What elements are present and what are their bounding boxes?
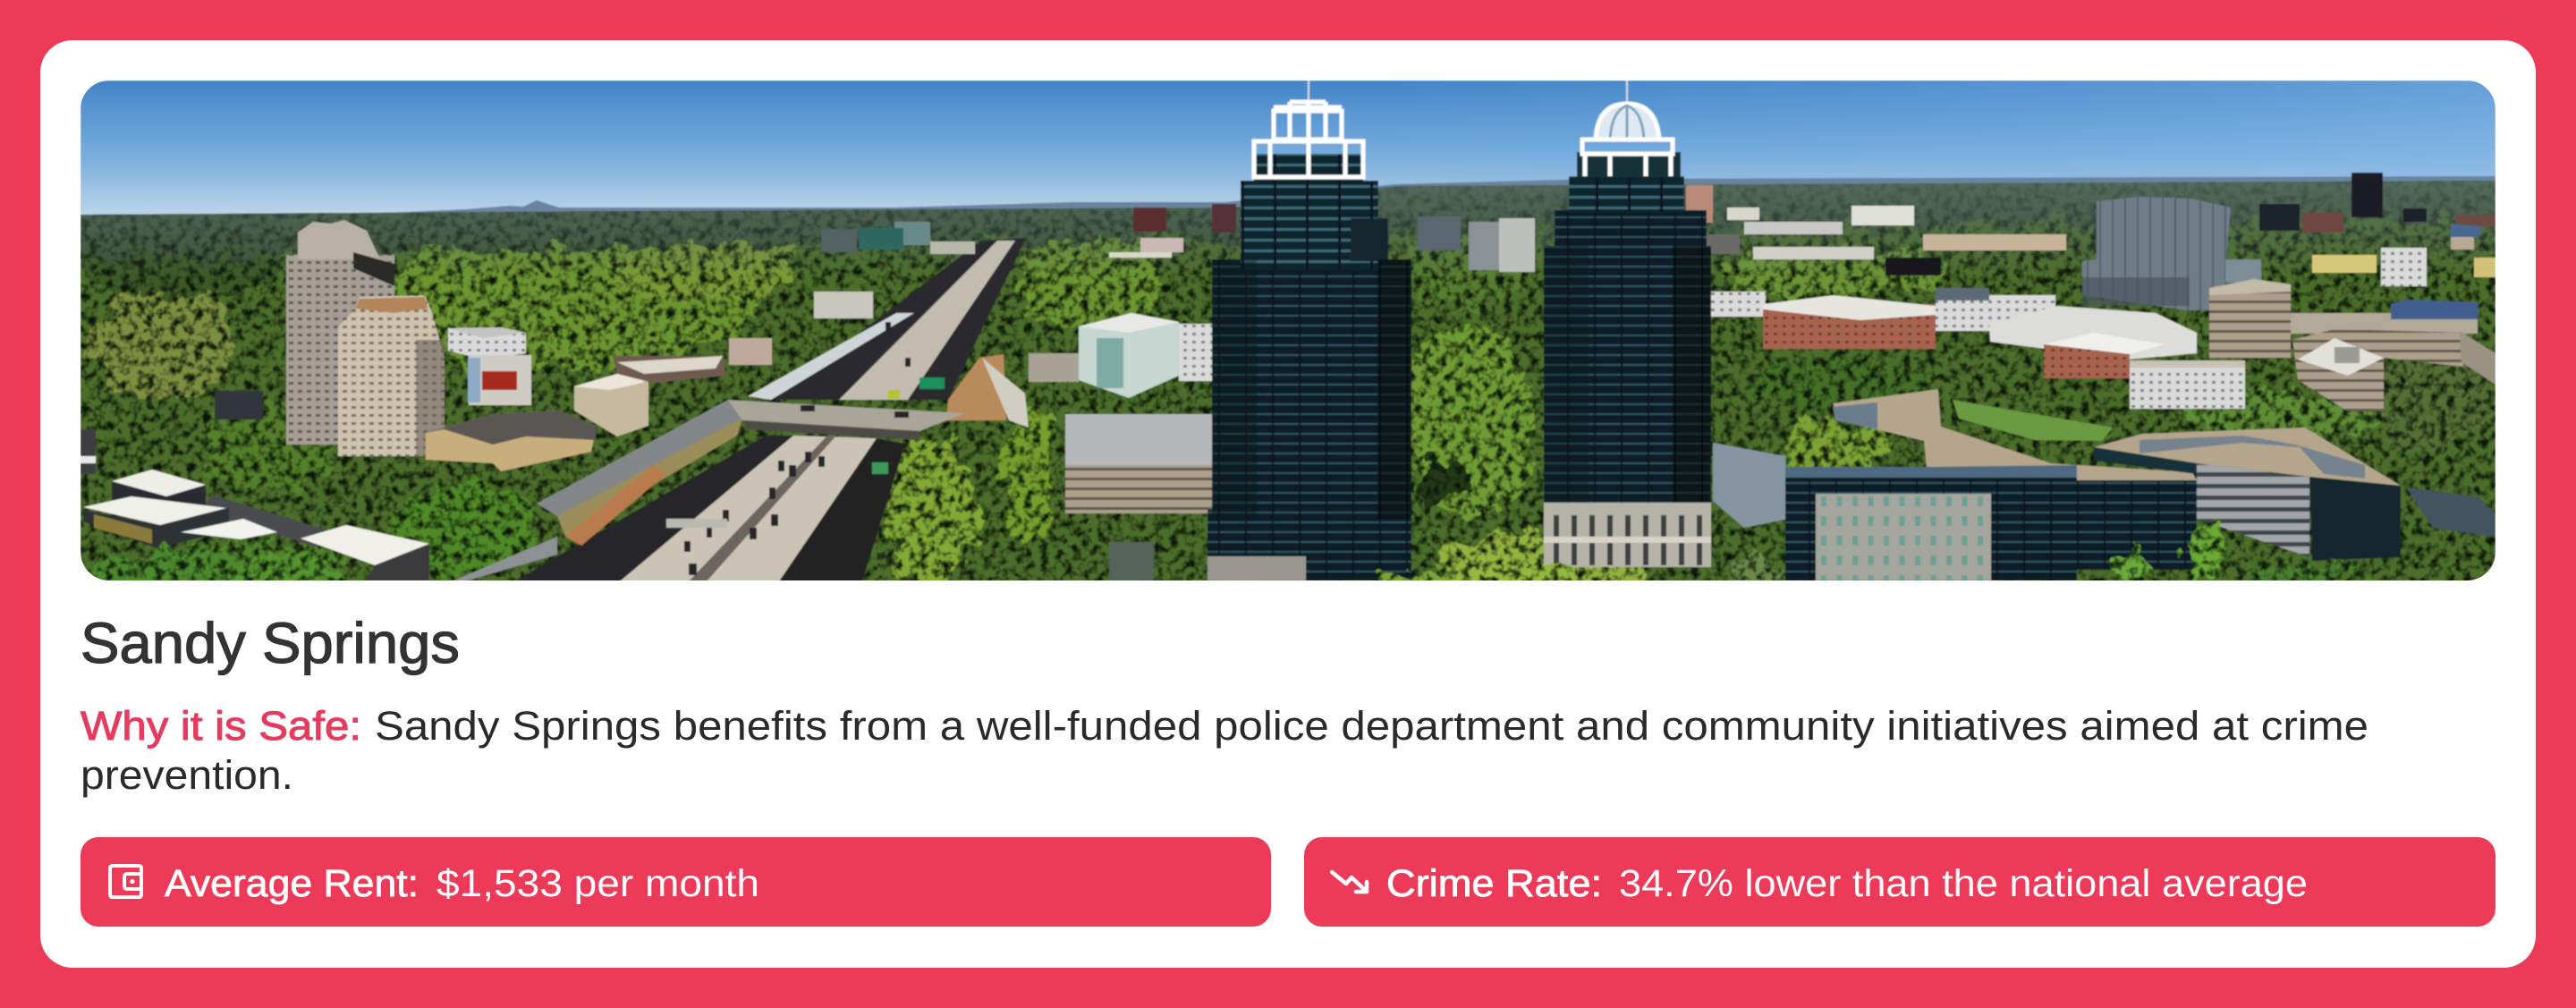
stat pill: average rent xyxy=(80,837,1271,927)
label: crime rate: Crime Rate: xyxy=(1386,862,1602,905)
photo: aerial view of Sandy Springs skyline xyxy=(63,80,2513,599)
foreground tree clumps lower right xyxy=(2109,521,2379,584)
label: average rent: Average Rent: xyxy=(165,862,419,905)
value: rent: $1,533 per month xyxy=(436,862,759,905)
stat pill: crime rate xyxy=(1304,837,2496,927)
foreground tree clumps lower left xyxy=(88,540,345,580)
vehicles and signs xyxy=(666,322,945,575)
upper highway xyxy=(748,238,1029,428)
low white buildings lower left xyxy=(80,429,429,581)
twin tower right xyxy=(1544,80,1711,567)
description xyxy=(80,703,2368,798)
lawn xyxy=(1953,400,2113,441)
residential towers left xyxy=(215,220,873,471)
description line 2: prevention. xyxy=(80,752,293,798)
distant hills xyxy=(397,175,2496,214)
foreground trees at tower base xyxy=(1374,548,1787,580)
twin tower left xyxy=(1208,80,1411,580)
lower highway xyxy=(452,400,905,581)
office complex lower right xyxy=(1713,389,2401,580)
tree canopy xyxy=(80,181,2496,580)
mid-rise and garage near highway xyxy=(821,204,1236,580)
pond xyxy=(2406,487,2496,537)
apartments and brick blocks xyxy=(1763,279,2496,411)
label: why it is safe: Why it is Safe: xyxy=(80,703,361,749)
background offices right of towers xyxy=(1418,173,2496,334)
icon: wallet xyxy=(110,866,141,897)
description line 1: Sandy Springs benefits from a well-funded police department and community initiatives aimed at crime xyxy=(375,703,2368,749)
title: Sandy Springs xyxy=(80,611,460,675)
value: crime rate: 34.7% lower than the national average xyxy=(1619,862,2308,905)
bridge xyxy=(728,400,965,440)
icon: trending down arrow xyxy=(1332,872,1367,892)
